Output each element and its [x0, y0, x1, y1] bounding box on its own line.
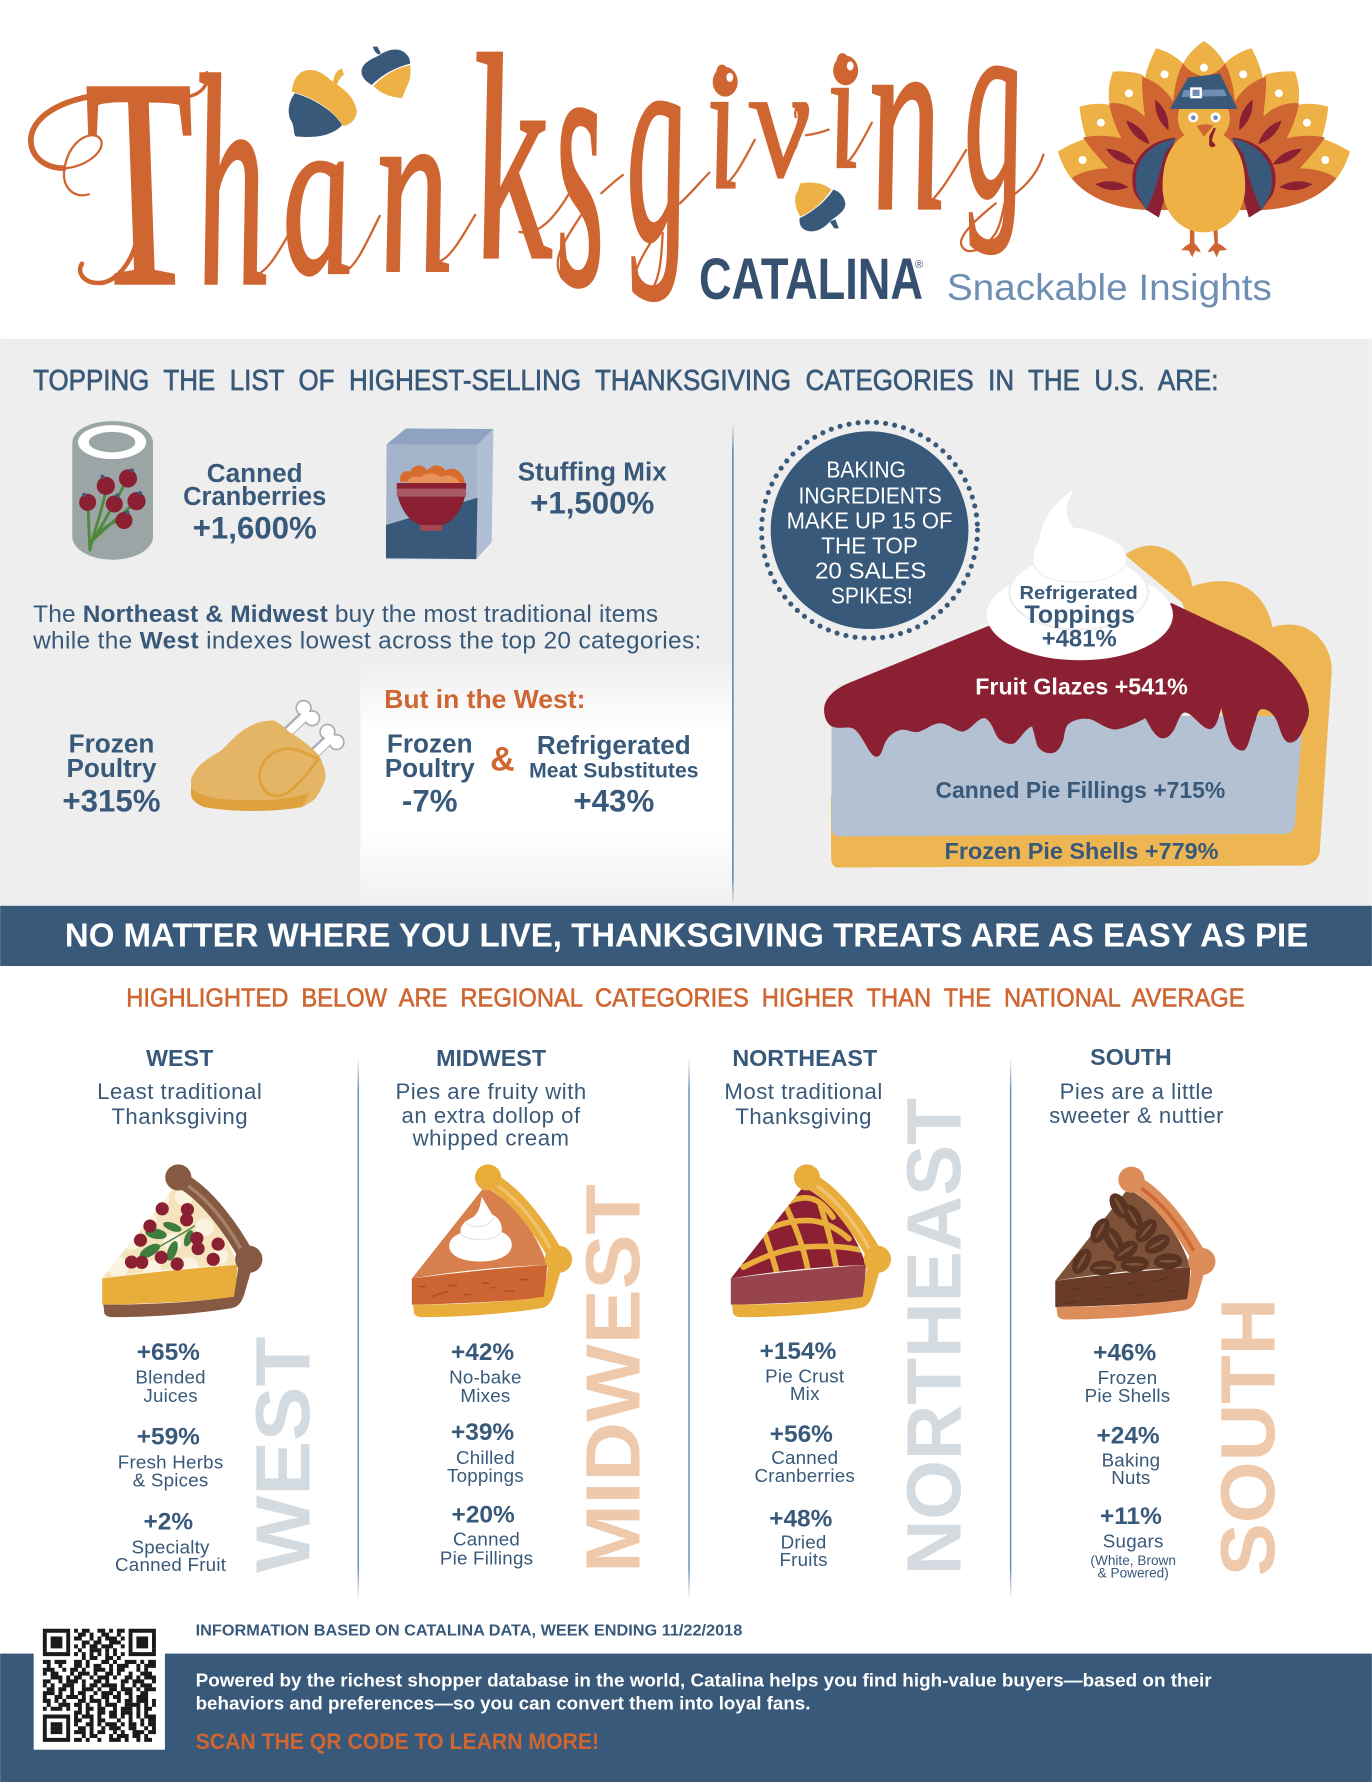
footer band — [0, 1654, 1372, 1782]
callout: baking ingredients badge: SPIKES! — [831, 582, 913, 608]
label: frozen poultry west: Poultry — [385, 753, 475, 783]
heading: west: WEST — [146, 1045, 213, 1071]
stat: frozen pie shells: Frozen — [1098, 1367, 1157, 1388]
label: refrigerated meat substitutes: +43% — [573, 783, 654, 818]
stat: pie crust mix: Pie Crust — [765, 1366, 845, 1387]
source note: INFORMATION BASED ON CATALINA DATA, WEEK ENDING 11/22/2018 — [196, 1622, 743, 1639]
description: northeast: Thanksgiving — [735, 1104, 872, 1129]
stat: specialty canned fruit: Specialty — [132, 1537, 210, 1558]
stat: baking nuts: Nuts — [1111, 1467, 1151, 1488]
stat: fresh herbs and spices — [118, 1423, 223, 1491]
ampersand: & — [490, 741, 515, 779]
stat: specialty canned fruit: Canned Fruit — [115, 1554, 227, 1575]
description: northeast — [724, 1079, 883, 1129]
description: west: Least traditional — [97, 1079, 262, 1104]
panel: west comparison — [360, 661, 732, 906]
stat: no-bake mixes: No-bake — [449, 1367, 522, 1388]
stat: no-bake mixes: +42% — [451, 1339, 514, 1366]
icon: northeast pie — [731, 1164, 891, 1317]
stat: sugars: Sugars — [1103, 1530, 1164, 1551]
title: Thanksgiving: a — [269, 64, 362, 325]
label: canned cranberries: +1,600% — [193, 511, 317, 546]
turkey feathers — [1058, 41, 1350, 210]
turkey feather markings — [1095, 98, 1313, 191]
footer copy: Powered by the richest shopper database in the world, Catalina helps you find high-value buyers—based on their — [196, 1670, 1212, 1691]
label: canned cranberries — [183, 458, 326, 546]
logo: Catalina: CATALINA — [699, 248, 923, 312]
callout: baking ingredients badge: BAKING — [826, 456, 906, 482]
description: south: sweeter & nuttier — [1049, 1103, 1224, 1128]
icon: midwest pie — [412, 1164, 572, 1317]
pie crust: frozen pie shells — [831, 546, 1332, 867]
stat: baking nuts: +24% — [1097, 1422, 1160, 1449]
turkey wings — [1132, 138, 1276, 218]
label: refrigerated meat substitutes: Meat Substitutes — [529, 759, 699, 782]
logo: Catalina: ® — [915, 259, 924, 271]
section divider — [732, 423, 734, 906]
title: Thanksgiving: i — [696, 24, 746, 228]
callout: baking ingredients badge: MAKE UP 15 OF — [787, 507, 953, 533]
heading: south: SOUTH — [1090, 1044, 1172, 1070]
stat: blended juices: +65% — [137, 1339, 200, 1366]
turkey feather dots — [1079, 64, 1329, 164]
stat: pie crust mix — [760, 1338, 845, 1404]
tagline: Snackable Insights: Snackable Insights — [947, 266, 1272, 308]
stat: blended juices — [135, 1339, 206, 1406]
panel: midwest — [395, 1045, 656, 1573]
stat: chilled toppings — [447, 1419, 524, 1486]
callout: baking ingredients badge: THE TOP — [821, 532, 918, 558]
heading: midwest: MIDWEST — [436, 1045, 546, 1071]
pie filling: canned pie fillings — [831, 716, 1303, 836]
stat: blended juices: Blended — [135, 1367, 206, 1388]
pie glaze: fruit glazes — [824, 603, 1309, 757]
stat: sugars: & Powered) — [1098, 1565, 1169, 1580]
title: Thanksgiving: i — [817, 17, 866, 205]
stat: no-bake mixes — [449, 1339, 522, 1406]
stat: dried fruits: Fruits — [780, 1549, 828, 1570]
icon: acorn bottom — [795, 183, 845, 231]
label: refrigerated toppings: Toppings — [1024, 601, 1135, 629]
watermark: west: WEST — [240, 1337, 326, 1573]
label: stuffing mix: Stuffing Mix — [518, 457, 667, 487]
stat: blended juices: Juices — [143, 1385, 198, 1406]
label: refrigerated toppings: Refrigerated — [1020, 582, 1138, 603]
description: south: Pies are a little — [1060, 1079, 1214, 1104]
stat: fresh herbs and spices: Fresh Herbs — [118, 1451, 223, 1472]
watermark: midwest: MIDWEST — [570, 1184, 656, 1573]
chart: pie of baking ingredients — [824, 488, 1332, 867]
heading: topping the list: TOPPING THE LIST OF HIGHEST-SELLING THANKSGIVING CATEGORIES IN THE U.S. ARE: — [33, 365, 1218, 397]
stat: fresh herbs and spices: & Spices — [133, 1470, 209, 1491]
label: refrigerated meat substitutes: Refrigerated — [537, 730, 691, 760]
label: refrigerated toppings: +481% — [1042, 626, 1117, 653]
label: stuffing mix: +1,500% — [530, 486, 654, 521]
stat: fresh herbs and spices: +59% — [137, 1423, 200, 1450]
stat: canned cranberries: Cranberries — [755, 1465, 855, 1486]
stat: no-bake mixes: Mixes — [460, 1385, 510, 1406]
description: midwest: an extra dollop of — [401, 1103, 581, 1128]
icon: south pie — [1055, 1167, 1215, 1319]
stat: canned cranberries: Canned — [771, 1447, 838, 1468]
footer copy — [196, 1670, 1212, 1713]
label: canned cranberries: Canned — [207, 458, 303, 488]
title: Thanksgiving: T — [59, 18, 228, 348]
text: regional paragraph: while the West indexes lowest across the top 20 categories: — [32, 627, 701, 654]
stat: specialty canned fruit: +2% — [144, 1509, 193, 1536]
QR code — [34, 1619, 165, 1750]
subheading: regional categories: HIGHLIGHTED BELOW ARE REGIONAL CATEGORIES HIGHER THAN THE NATIONAL AVERAGE — [126, 984, 1245, 1012]
label: refrigerated meat substitutes — [529, 730, 699, 818]
stat: frozen pie shells: +46% — [1093, 1339, 1157, 1366]
title: Thanksgiving: h — [182, 15, 276, 349]
stat: dried fruits — [769, 1505, 833, 1570]
watermark: northeast: NORTHEAST — [891, 1098, 977, 1575]
label: frozen poultry west: Frozen — [387, 728, 473, 758]
stat: canned cranberries — [755, 1421, 855, 1486]
description: midwest: Pies are fruity with — [395, 1079, 587, 1104]
stat: chilled toppings: Chilled — [456, 1447, 515, 1468]
text: regional paragraph: The Northeast & Midwest buy the most traditional items — [33, 601, 658, 628]
description: west — [97, 1079, 262, 1129]
title: Thanksgiving: n — [364, 52, 459, 324]
label: frozen poultry: Poultry — [67, 753, 157, 783]
stat: canned pie fillings: Pie Fillings — [440, 1547, 533, 1568]
turkey hat — [1170, 74, 1238, 109]
panel: south — [1049, 1044, 1292, 1580]
icon: pilgrim turkey — [1058, 41, 1350, 257]
stat: pie crust mix: +154% — [760, 1338, 837, 1365]
label: frozen poultry west — [385, 728, 475, 818]
stat: baking nuts — [1097, 1422, 1160, 1488]
panel: west — [97, 1045, 326, 1575]
label: canned pie fillings: Canned Pie Fillings +715% — [935, 777, 1225, 803]
panel: northeast — [724, 1045, 977, 1575]
heading: northeast: NORTHEAST — [732, 1045, 877, 1071]
description: midwest: whipped cream — [412, 1126, 570, 1151]
stat: chilled toppings: +39% — [451, 1419, 514, 1446]
turkey face — [1188, 112, 1221, 147]
icon: west pie — [102, 1164, 262, 1317]
panel: top categories background — [0, 339, 1372, 906]
footer copy: behaviors and preferences—so you can convert them into loyal fans. — [196, 1692, 810, 1713]
stat: specialty canned fruit — [115, 1509, 227, 1575]
description: west: Thanksgiving — [111, 1104, 248, 1129]
watermark: south: SOUTH — [1206, 1298, 1292, 1576]
callout: baking ingredients badge: 20 SALES — [815, 557, 926, 583]
call to action: SCAN THE QR CODE TO LEARN MORE! — [196, 1729, 599, 1754]
title: Thanksgiving — [59, 0, 1031, 363]
stat: canned cranberries: +56% — [770, 1421, 833, 1448]
stat: dried fruits: Dried — [781, 1531, 827, 1552]
callout: baking ingredients badge — [762, 422, 978, 638]
label: fruit glazes: Fruit Glazes +541% — [975, 673, 1188, 699]
stat: dried fruits: +48% — [769, 1505, 833, 1532]
text: regional paragraph — [32, 601, 701, 654]
stat: canned pie fillings — [440, 1501, 533, 1568]
icon: acorn left — [289, 68, 357, 137]
stat: frozen pie shells: Pie Shells — [1085, 1385, 1170, 1406]
turkey body — [1163, 93, 1245, 232]
icon: stuffing mix box — [386, 428, 493, 559]
icon: roast turkey — [191, 701, 344, 811]
label: frozen poultry: Frozen — [69, 728, 154, 758]
heading: but in the west: But in the West: — [384, 686, 585, 714]
description: south — [1049, 1079, 1224, 1128]
banner: NO MATTER WHERE YOU LIVE, THANKSGIVING TREATS ARE AS EASY AS PIE — [65, 917, 1308, 954]
header: title and brand — [31, 0, 1350, 363]
title flourishes — [31, 56, 1043, 295]
stat: pie crust mix: Mix — [790, 1383, 820, 1404]
label: stuffing mix — [518, 457, 667, 521]
stat: chilled toppings: Toppings — [447, 1465, 524, 1486]
label: canned cranberries: Cranberries — [183, 481, 326, 511]
stat: sugars — [1090, 1503, 1176, 1580]
title: Thanksgiving: v — [739, 35, 822, 211]
callout: baking ingredients badge: INGREDIENTS — [799, 482, 942, 508]
stat: sugars: (White, Brown — [1090, 1553, 1176, 1568]
icon: acorn right — [362, 47, 411, 98]
icon: cranberry can — [72, 421, 153, 560]
label: frozen poultry: +315% — [62, 783, 161, 818]
pie cream: refrigerated toppings — [987, 488, 1173, 660]
stat: frozen pie shells — [1085, 1339, 1170, 1406]
label: frozen poultry west: -7% — [402, 783, 458, 818]
title: Thanksgiving: k — [459, 0, 561, 321]
label: refrigerated toppings — [1020, 582, 1138, 653]
stat: sugars: +11% — [1100, 1503, 1162, 1530]
stat: baking nuts: Baking — [1102, 1450, 1160, 1471]
turkey legs — [1181, 228, 1227, 257]
banner — [0, 906, 1372, 966]
stat: canned pie fillings: Canned — [453, 1529, 520, 1550]
label: frozen poultry — [62, 728, 161, 818]
description: midwest — [395, 1079, 587, 1151]
label: frozen pie shells: Frozen Pie Shells +779% — [945, 838, 1218, 864]
description: northeast: Most traditional — [724, 1079, 883, 1104]
stat: canned pie fillings: +20% — [452, 1501, 515, 1528]
